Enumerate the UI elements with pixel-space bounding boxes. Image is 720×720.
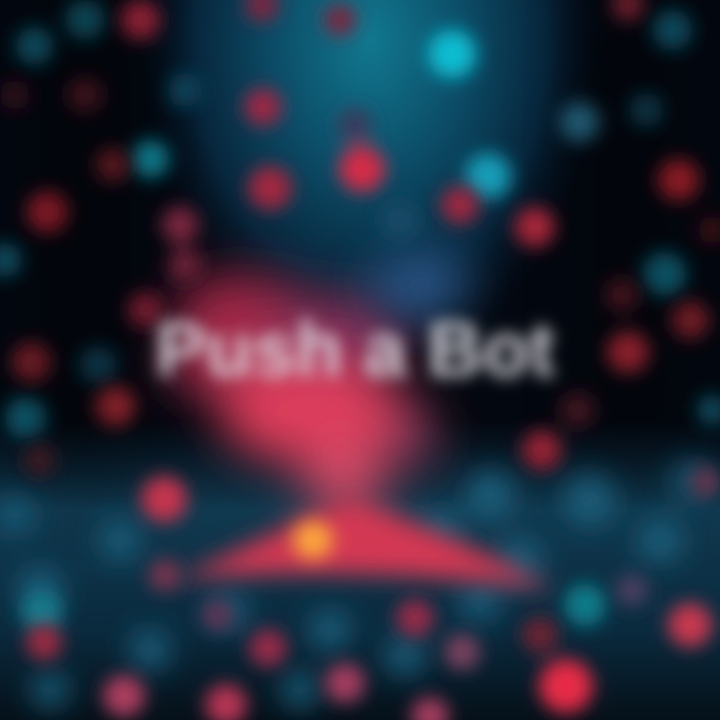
bright orange core (293, 521, 333, 559)
blue floor haze (0, 420, 720, 720)
red glowing tent shape (175, 498, 555, 590)
blue floor particles (0, 462, 708, 708)
soft blue patch upper right of title (370, 253, 470, 317)
red burst behind title (165, 275, 435, 515)
title (blurred): Push a Bot (155, 305, 555, 393)
dark vertical side vignette (60, 0, 650, 480)
teal glow from top (0, 0, 720, 560)
